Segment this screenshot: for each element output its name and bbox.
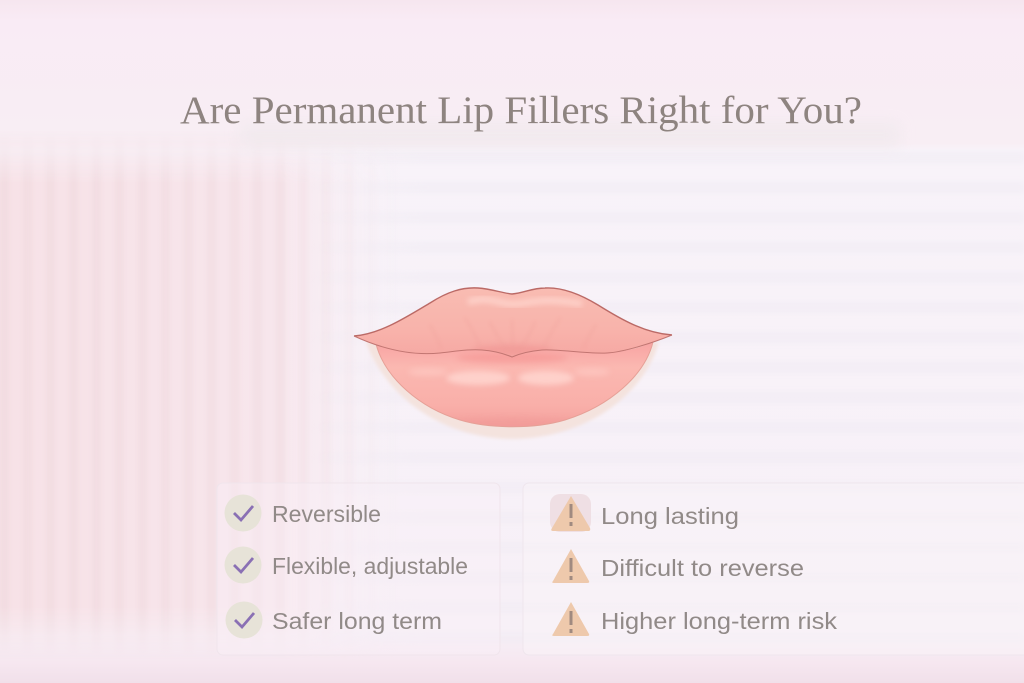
item: Reversible: Reversible [272,501,381,527]
item: Safer long term [226,602,442,638]
item: Flexible, adjustable: Flexible, adjustable [272,553,468,579]
item: Long lasting: Long lasting [601,503,739,529]
panel: risks [523,483,1024,655]
item: Reversible [224,494,381,532]
lower lip [376,342,654,428]
page background [0,158,1024,683]
title: Are Permanent Lip Fillers Right for You? [180,89,862,132]
lip shadow [366,342,659,439]
illustration: lips [354,288,672,439]
item: Safer long term: Safer long term [272,608,442,634]
upper lip [354,288,672,357]
item: Long lasting [550,494,739,532]
item: Higher long-term risk: Higher long-term risk [601,608,838,634]
item: Difficult to reverse: Difficult to reverse [601,555,804,581]
item: Higher long-term risk [552,602,838,636]
item: Flexible, adjustable [224,546,468,584]
panel: benefits [217,483,500,655]
lip outline [354,288,672,336]
item: Difficult to reverse [552,549,804,583]
